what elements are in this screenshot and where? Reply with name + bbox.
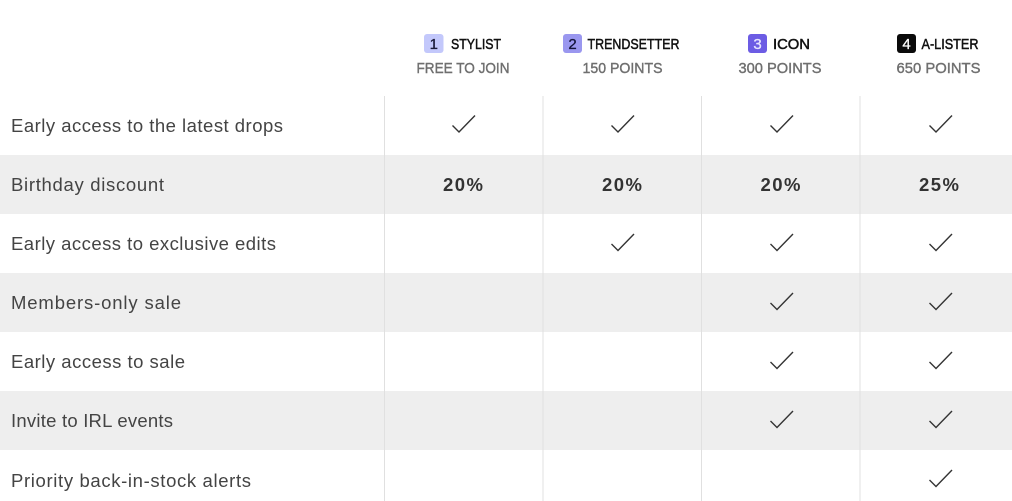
row: early access to the latest drops bbox=[11, 115, 952, 136]
tier header: trendsetter: 150 POINTS bbox=[582, 60, 662, 77]
row: members-only sale bbox=[11, 292, 952, 313]
row: early access to sale bbox=[11, 351, 952, 372]
tier header: a-lister bbox=[896, 34, 980, 77]
tier header: a-lister: 650 POINTS bbox=[896, 60, 980, 77]
tier header: a-lister: A-LISTER bbox=[922, 36, 979, 53]
tier header: a-lister: 4 bbox=[902, 36, 911, 53]
row: birthday discount: 20% bbox=[602, 174, 642, 195]
row: birthday discount: 25% bbox=[919, 174, 959, 195]
row: members-only sale: Members-only sale bbox=[11, 292, 181, 313]
tier header: stylist: FREE TO JOIN bbox=[416, 60, 510, 77]
tier header: trendsetter: TRENDSETTER bbox=[588, 36, 680, 53]
row: birthday discount: 20% bbox=[760, 174, 800, 195]
row: priority back-in-stock alerts: Priority back-in-stock alerts bbox=[11, 470, 251, 491]
row: early access to exclusive edits bbox=[11, 233, 952, 254]
tier header: trendsetter: 2 bbox=[568, 36, 577, 53]
row: birthday discount bbox=[11, 174, 959, 195]
row: birthday discount: Birthday discount bbox=[11, 174, 164, 195]
tier header: icon: 300 POINTS bbox=[738, 60, 822, 77]
tier header: icon: ICON bbox=[773, 36, 810, 53]
tier header: stylist: STYLIST bbox=[451, 36, 501, 53]
row: birthday discount: 20% bbox=[443, 174, 483, 195]
row: invite to IRL events bbox=[11, 410, 952, 431]
row: priority back-in-stock alerts bbox=[11, 470, 952, 491]
row: early access to sale: Early access to sale bbox=[11, 351, 185, 372]
row: invite to IRL events: Invite to IRL events bbox=[11, 410, 173, 431]
row: early access to exclusive edits: Early access to exclusive edits bbox=[11, 233, 276, 254]
tier header: icon bbox=[738, 34, 822, 77]
tier header: trendsetter bbox=[563, 34, 680, 77]
tier header: icon: 3 bbox=[753, 36, 762, 53]
tier header: stylist bbox=[416, 34, 510, 77]
row: early access to the latest drops: Early access to the latest drops bbox=[11, 115, 283, 136]
tier header: stylist: 1 bbox=[430, 36, 438, 53]
